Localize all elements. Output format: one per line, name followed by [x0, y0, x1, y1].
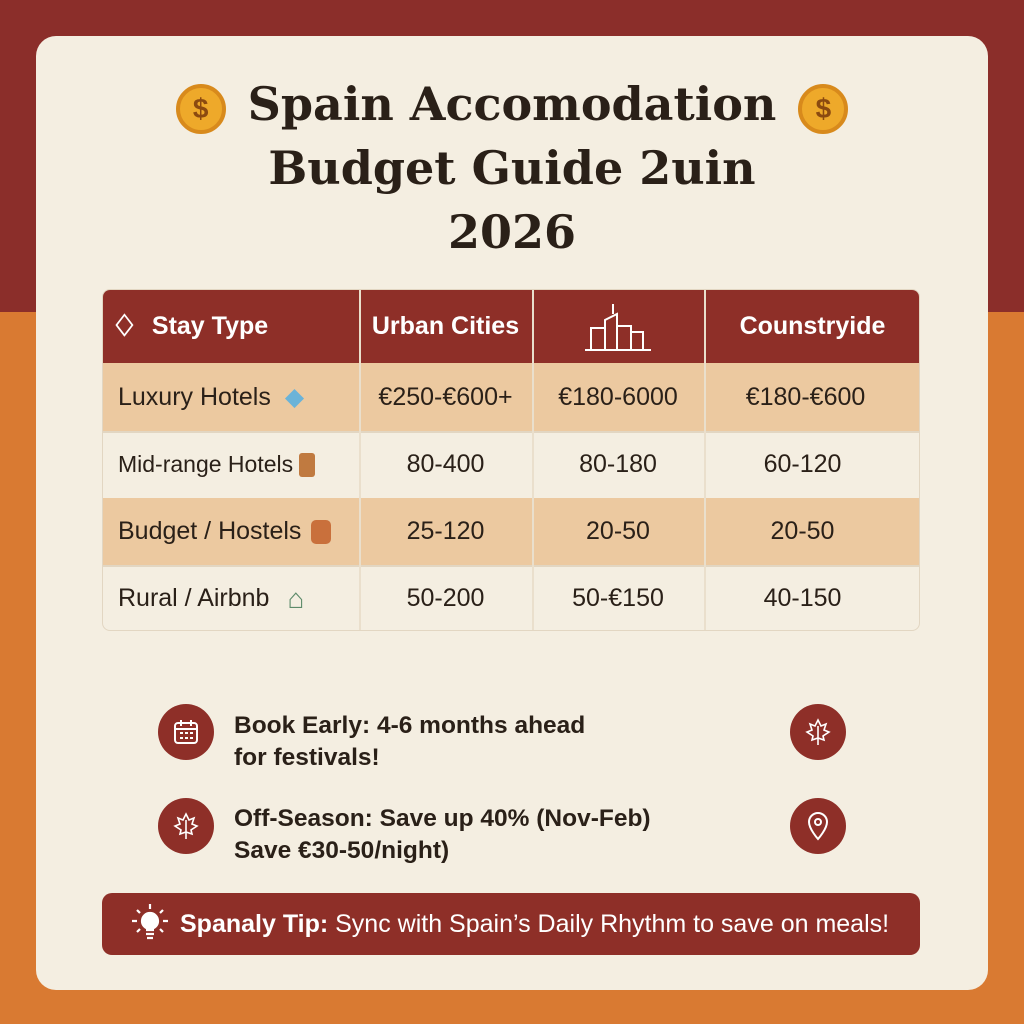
table: Rural / Airbnb: [118, 584, 269, 612]
table: 80-180: [579, 450, 657, 478]
table: €180-€600: [746, 382, 865, 410]
table: 20-50: [771, 517, 834, 545]
header: urban: Urban Cities: [372, 312, 519, 340]
table: Mid-range Hotels: [118, 451, 293, 477]
table: 80-400: [407, 450, 484, 478]
title: 2026: [448, 205, 576, 259]
tip: book early: Book Early: 4-6 months ahead: [234, 712, 585, 739]
tip: off-season: Off-Season: Save up 40% (Nov-Feb): [234, 805, 651, 832]
title: Budget Guide 2uin: [268, 141, 756, 195]
table: 50-€150: [572, 584, 664, 612]
header: stay type: Stay Type: [152, 312, 268, 340]
tip: off-season: Save €30-50/night): [234, 837, 449, 864]
icon: calendar: [158, 704, 214, 760]
banner: spanaly tip: [102, 893, 920, 955]
banner: spanaly tip: Sync with Spain’s Daily Rhythm to save on meals!: [335, 910, 889, 938]
table: 40-150: [764, 584, 841, 612]
icon: leaf right: [790, 704, 846, 760]
table: €180-6000: [558, 382, 678, 410]
icon: coin left: [176, 84, 226, 134]
table: 25-120: [407, 517, 484, 545]
rows: ◆: [285, 383, 304, 411]
icon: coin left: $: [193, 93, 208, 124]
header: city icon: [585, 304, 651, 351]
tip: book early: [234, 712, 585, 771]
header: stay type: ♢: [111, 310, 138, 343]
table: 20-50: [586, 517, 650, 545]
header: stay type: [111, 310, 268, 343]
rows: Luxury Hotels: [118, 382, 271, 410]
tip: off-season: [234, 805, 651, 864]
table: ⌂: [287, 582, 304, 614]
title: $: [816, 93, 831, 124]
banner: spanaly tip: Spanaly Tip:: [180, 910, 328, 938]
title: [176, 77, 848, 259]
table: 60-120: [764, 450, 841, 478]
table: €250-€600+: [378, 382, 513, 410]
icon: leaf: [158, 798, 214, 854]
table: 50-200: [407, 584, 484, 612]
icon: bulb: [132, 904, 168, 940]
header: countryside: Counstryide: [740, 312, 885, 340]
title: Spain Accomodation: [248, 77, 776, 131]
table: [102, 289, 920, 631]
tip: book early: for festivals!: [234, 744, 380, 771]
icon: location pin: [790, 798, 846, 854]
table: Budget / Hostels: [118, 517, 301, 545]
